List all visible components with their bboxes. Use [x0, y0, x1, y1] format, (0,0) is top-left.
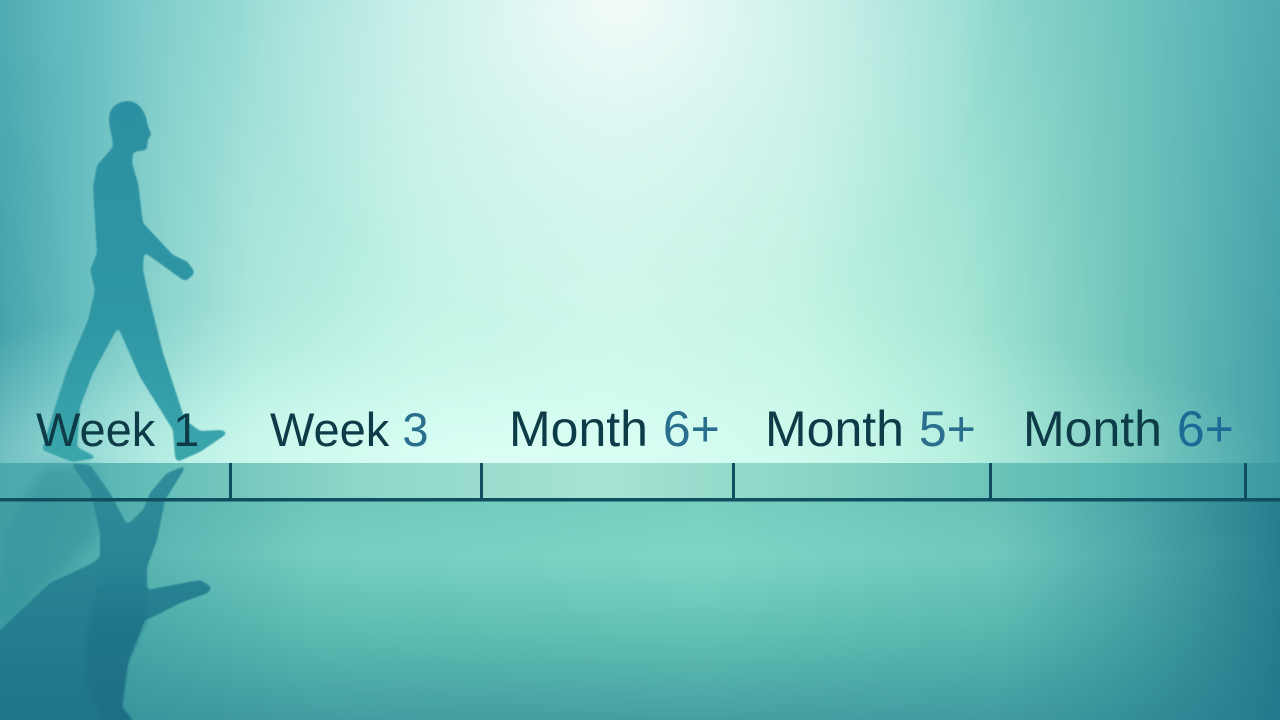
timeline labels [36, 401, 1234, 457]
label: Week 1: Week 1 [36, 403, 199, 456]
label: Month 6+ (first): Month 6+ [509, 401, 720, 457]
walking person silhouette [42, 101, 228, 462]
background wall [0, 0, 1280, 463]
label: Month 6+ (last): Month 6+ [1023, 401, 1234, 457]
label: Week 3: Week 3 [270, 403, 428, 456]
floor [0, 463, 1280, 720]
label: Month 5+: Month 5+ [765, 401, 976, 457]
timeline axis with ticks [0, 463, 1280, 502]
floor reflection of walker [0, 463, 212, 720]
